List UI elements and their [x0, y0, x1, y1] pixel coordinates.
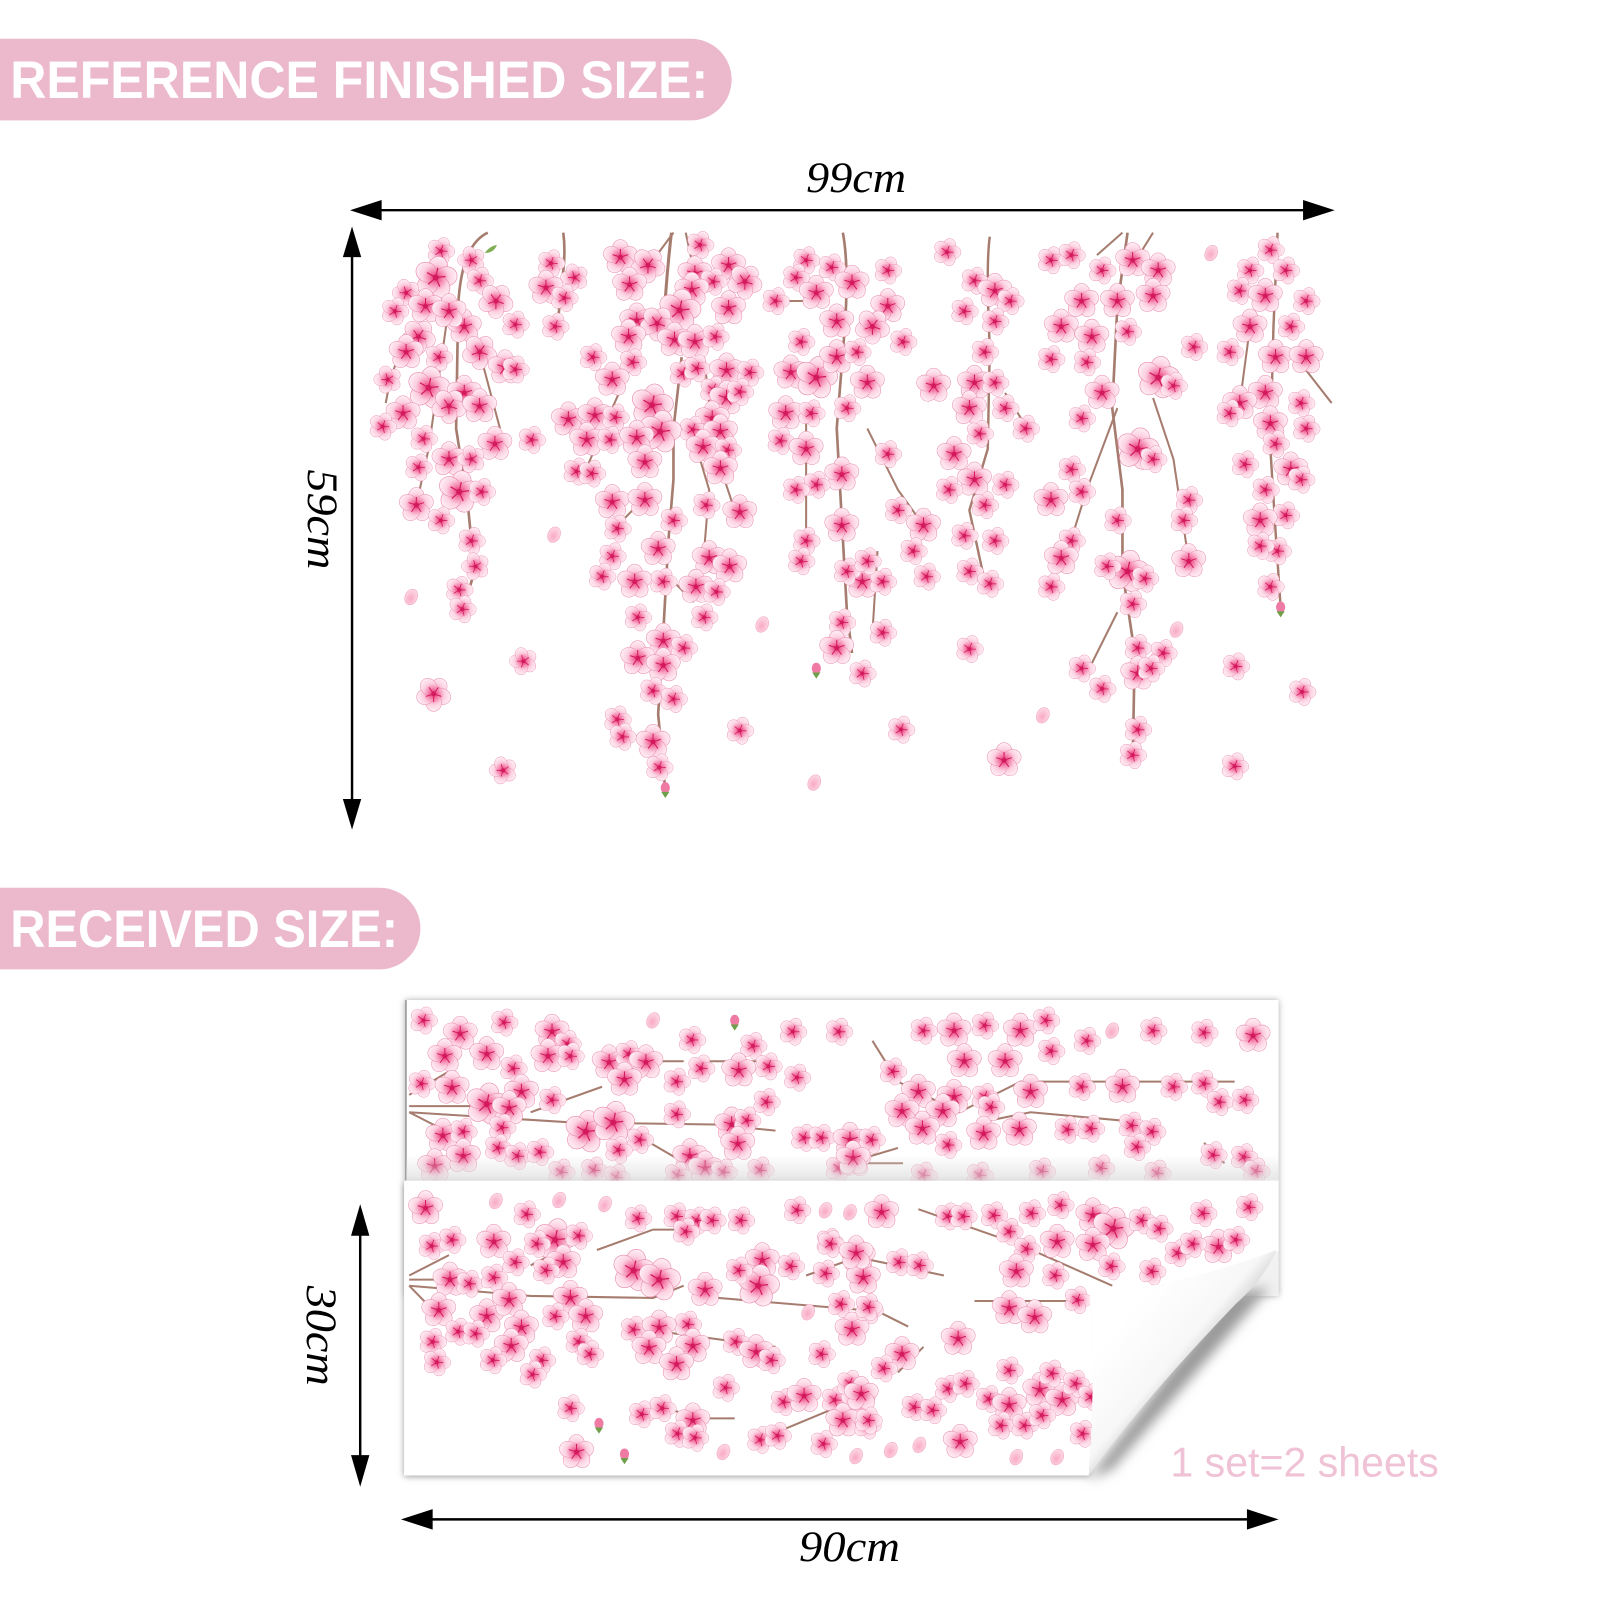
vine 5 blossoms	[1031, 237, 1213, 775]
height arrow: 30cm: 30cm	[297, 1285, 345, 1386]
sticker sheet 1 (back sheet)	[402, 1000, 1279, 1296]
height arrow: 59cm	[298, 227, 361, 830]
vine 3 blossoms	[756, 242, 946, 693]
vine 4	[927, 234, 1045, 603]
vine 1 stems	[386, 233, 564, 612]
sheet 1 artwork	[408, 1006, 1270, 1181]
vine 4 stems	[969, 237, 1031, 582]
note: 1 set = 2 sheets: 1 set=2 sheets	[1170, 1439, 1439, 1486]
vine 3	[756, 233, 946, 693]
vine 5 stems	[1061, 233, 1189, 765]
width arrow: 99cm	[350, 154, 1335, 220]
vine 4 blossoms	[927, 234, 1045, 603]
vine 2 stems	[582, 233, 735, 791]
vine 6 blossoms	[1210, 232, 1325, 617]
width arrow: 90cm	[401, 1509, 1279, 1571]
sticker sheet 2 (front sheet)	[404, 1181, 1279, 1477]
width arrow: 90cm: 90cm	[799, 1523, 900, 1571]
heading banner: reference finished size	[0, 39, 732, 120]
width arrow: 99cm: 99cm	[806, 154, 906, 202]
heading banner: received size	[0, 888, 420, 969]
sheet 2 artwork	[406, 1187, 1268, 1471]
heading banner: reference finished size: REFERENCE FINISHED SIZE:	[10, 51, 708, 110]
peeled corner curl	[1089, 1250, 1277, 1476]
curl shadow	[1088, 1288, 1269, 1480]
vine 1 blossoms	[363, 233, 595, 629]
height arrow: 59cm: 59cm	[298, 469, 346, 569]
vine 3 stems	[765, 233, 923, 653]
vine 2 blossoms	[549, 226, 771, 798]
height arrow: 30cm	[297, 1204, 369, 1487]
vine 2	[549, 226, 771, 798]
heading banner: received size: RECEIVED SIZE:	[10, 900, 398, 959]
finished wall decal: hanging blossom vines	[363, 226, 1332, 798]
vine 5	[1031, 233, 1213, 775]
fallen blossoms and petals	[402, 243, 1321, 793]
vine 6	[1210, 232, 1332, 617]
vine 6 stems	[1240, 233, 1332, 607]
vine 1	[363, 233, 595, 629]
